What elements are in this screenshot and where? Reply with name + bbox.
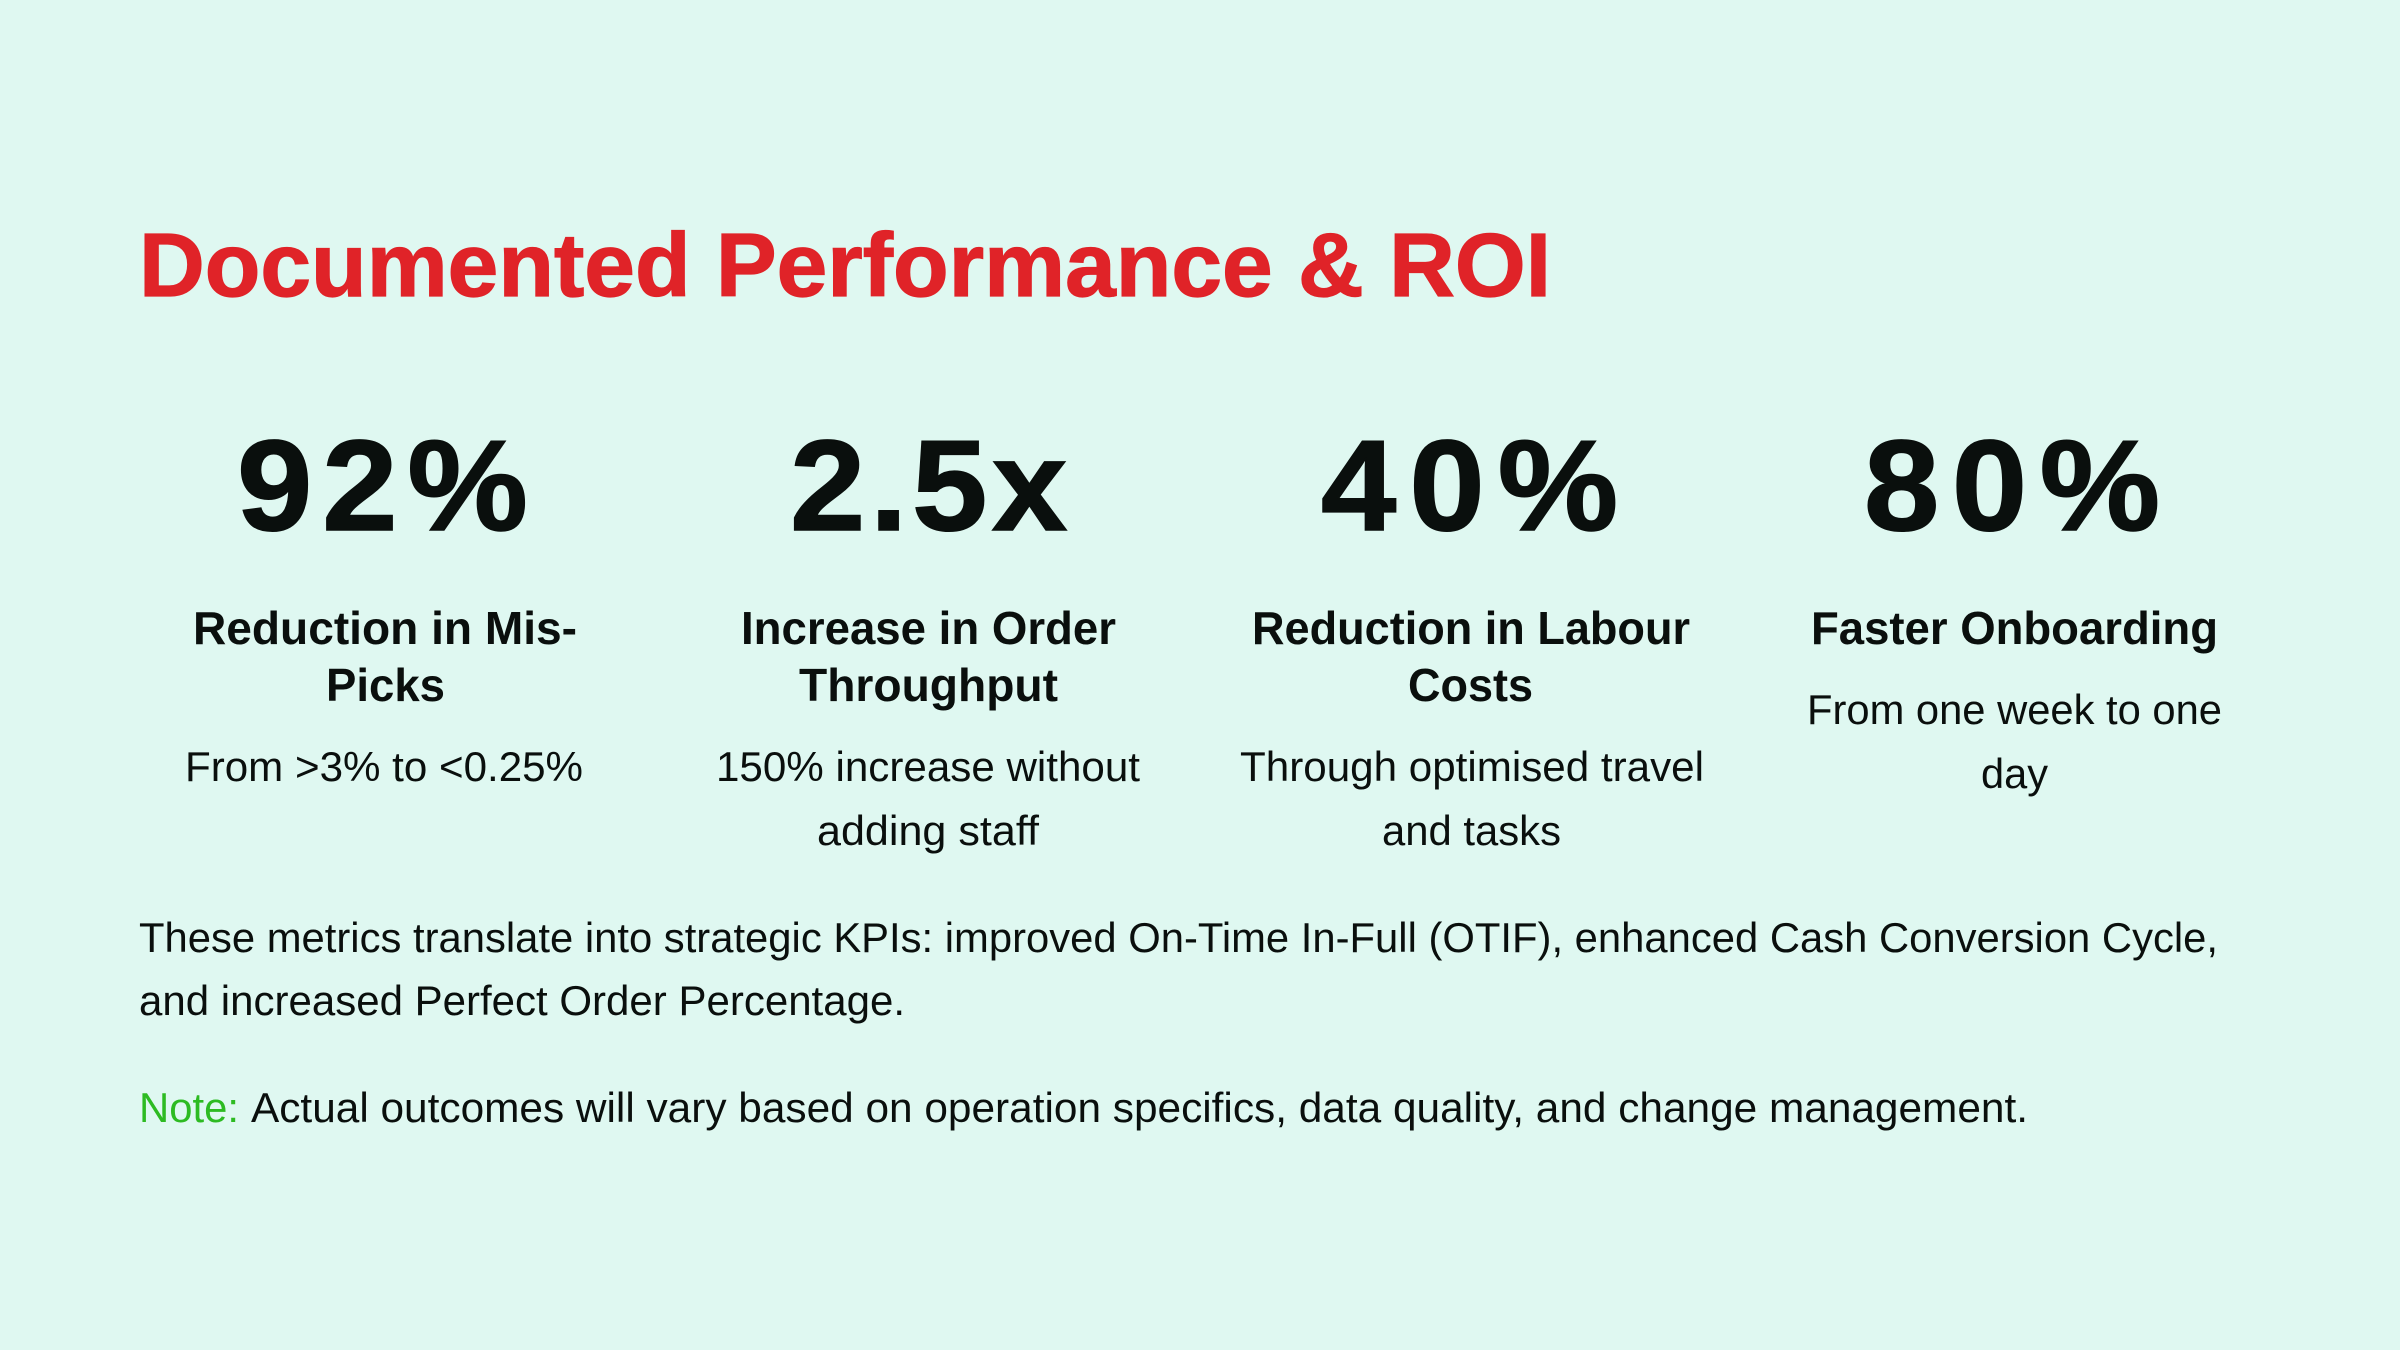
body paragraph: These metrics translate into strategic KPIs: improved On-Time In-Full (OTIF), enhanced Cash Conversion Cycle, xyxy=(139,914,2218,961)
note: Note: xyxy=(139,1084,239,1131)
KPI detail: throughput: 150% increase without xyxy=(716,743,1140,790)
panel: KPI 2.5x xyxy=(716,414,1140,854)
panel: KPI 80% xyxy=(1807,414,2222,797)
KPI heading: throughput xyxy=(741,602,1116,711)
KPI detail: onboarding: From one week to one xyxy=(1807,686,2222,733)
KPI detail: labour costs: and tasks xyxy=(1382,807,1561,854)
KPI heading: throughput: Increase in Order xyxy=(741,602,1116,654)
KPI heading: labour costs: Costs xyxy=(1408,659,1533,711)
KPI detail: labour costs xyxy=(1240,743,1704,854)
panel: KPI 40% xyxy=(1240,414,1704,854)
KPI detail: mis-picks: From >3% to <0.25% xyxy=(185,743,583,790)
KPI heading: throughput: Throughput xyxy=(799,659,1058,711)
panel: KPI 92% xyxy=(185,414,583,790)
KPI heading: mis-picks: Picks xyxy=(326,659,445,711)
big number: 40%: 40% xyxy=(1321,414,1618,558)
KPI heading: mis-picks xyxy=(193,602,577,711)
KPI detail: throughput xyxy=(716,743,1140,854)
body paragraph xyxy=(139,914,2218,1024)
body paragraph: and increased Perfect Order Percentage. xyxy=(139,977,905,1024)
title: Documented Performance & ROI xyxy=(139,216,1551,316)
KPI detail: onboarding xyxy=(1807,686,2222,797)
KPI heading: mis-picks: Reduction in Mis- xyxy=(193,602,577,654)
KPI detail: throughput: adding staff xyxy=(817,807,1039,854)
KPI heading: onboarding: Faster Onboarding xyxy=(1811,602,2218,654)
big number: 2.5x: 2.5x xyxy=(790,414,1067,558)
KPI detail: onboarding: day xyxy=(1981,750,2048,797)
KPI detail: labour costs: Through optimised travel xyxy=(1240,743,1704,790)
big number: 80%: 80% xyxy=(1864,414,2160,558)
KPI heading: labour costs: Reduction in Labour xyxy=(1252,602,1690,654)
KPI heading: labour costs xyxy=(1252,602,1690,711)
big number: 92%: 92% xyxy=(237,414,528,558)
note: Actual outcomes will vary based on operation specifics, data quality, and change management. xyxy=(251,1084,2028,1131)
